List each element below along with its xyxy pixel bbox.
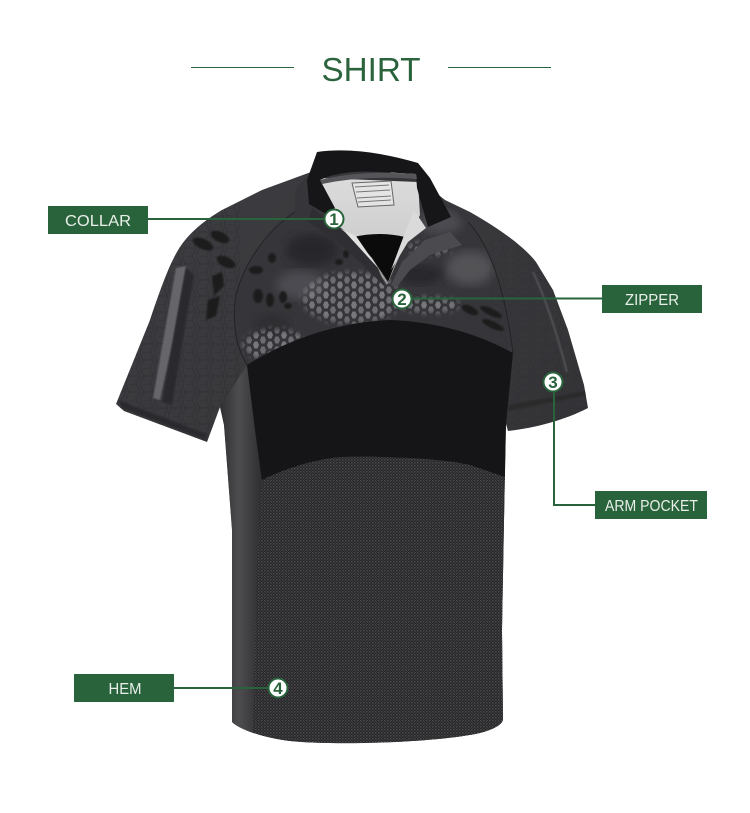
- hexagon scales: [240, 238, 461, 358]
- mesh lower panel: [253, 457, 505, 745]
- title: SHIRT: [322, 52, 420, 89]
- callout: collar: [48, 206, 344, 234]
- yoke camo: [241, 210, 504, 358]
- callout: collar: COLLAR: [65, 213, 131, 230]
- right sleeve: [506, 240, 588, 427]
- callout: arm pocket: [544, 372, 707, 519]
- left sleeve camo: [118, 202, 238, 444]
- callout: hem: [74, 674, 288, 702]
- dark blotches: [249, 250, 505, 333]
- callout: hem: 4: [273, 679, 283, 698]
- collar and neck opening: [307, 150, 462, 288]
- raglan seams: [234, 212, 295, 365]
- callout: hem: HEM: [108, 681, 142, 698]
- callout: zipper: ZIPPER: [625, 292, 679, 309]
- collar band: [307, 150, 451, 227]
- callout: arm pocket: ARM POCKET: [605, 498, 698, 515]
- callout: collar: 1: [329, 210, 339, 229]
- shirt illustration: [100, 150, 600, 750]
- callout: arm pocket: 3: [548, 373, 558, 392]
- shirt body base: [116, 172, 588, 744]
- icon: neck label: [352, 181, 394, 207]
- callout: zipper: [392, 285, 702, 313]
- callout: zipper: 2: [397, 290, 407, 309]
- black chest panel: [247, 320, 513, 481]
- body sides: [220, 365, 262, 745]
